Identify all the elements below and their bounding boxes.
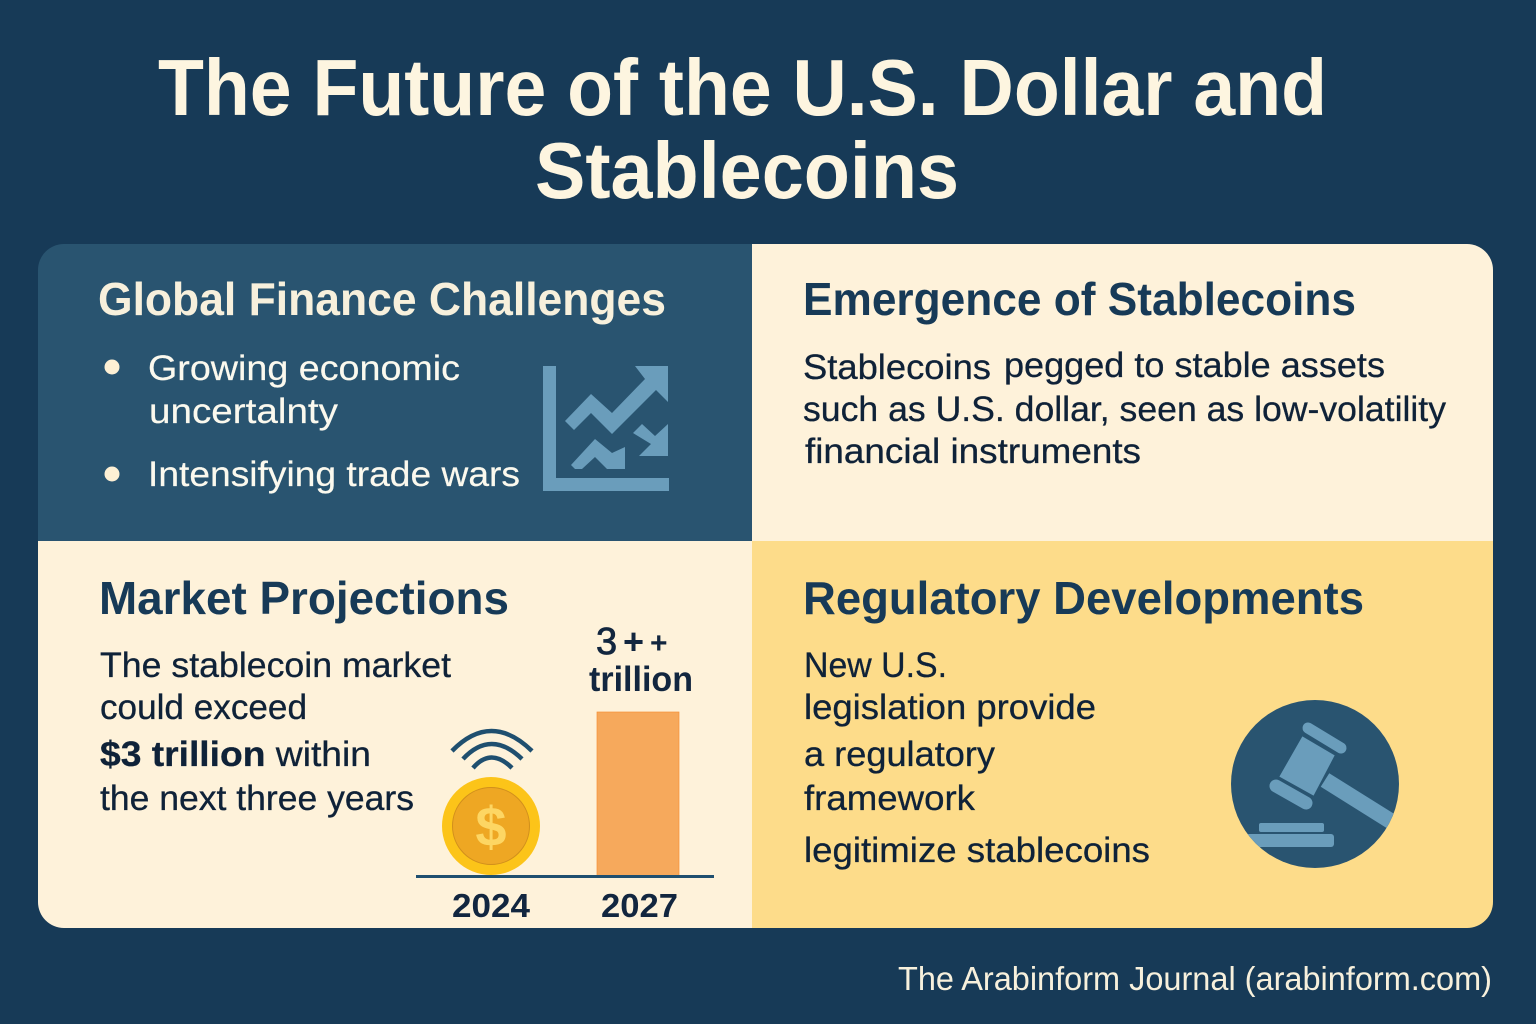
- icon: signal waves: [452, 731, 532, 768]
- bar label: 3++ trillion: +: [650, 627, 668, 660]
- paragraph: market forecast: [100, 646, 451, 818]
- panel: market projections: [38, 541, 752, 928]
- paragraph: market forecast: The stablecoin market: [100, 646, 451, 685]
- paragraph: market forecast: could exceed: [100, 688, 307, 727]
- heading: regulatory developments: Regulatory Developments: [803, 572, 1364, 624]
- bar label: 3++ trillion: +: [623, 621, 644, 662]
- title: The Future of the U.S. Dollar and: [158, 43, 1327, 132]
- paragraph: legislation: a regulatory: [804, 735, 996, 774]
- heading: emergence of stablecoins: Emergence of Stablecoins: [803, 273, 1356, 325]
- axis: [416, 875, 714, 878]
- paragraph: market forecast: $3 trillion within: [100, 735, 371, 774]
- icon: dollar coin: [442, 777, 540, 875]
- footer credit: The Arabinform Journal (arabinform.com): [898, 960, 1492, 997]
- bar label: 3++ trillion: 3: [596, 621, 617, 663]
- panel: emergence of stablecoins: [752, 244, 1493, 541]
- chart: 2024 versus 2027: [416, 621, 714, 924]
- bar label: 3++ trillion: [589, 627, 691, 692]
- paragraph: stablecoin definition: [804, 351, 1446, 464]
- bullet list: Intensifying trade wars: [148, 455, 520, 494]
- icon: dollar coin: $: [475, 795, 507, 858]
- axis label: 2024: 2024: [452, 887, 531, 924]
- icon: gavel: [1231, 700, 1400, 868]
- paragraph: stablecoin definition: financial instruments: [805, 432, 1141, 471]
- title: [158, 43, 1327, 215]
- bar label: 3++ trillion: trillion: [589, 660, 693, 699]
- paragraph: legislation: legislation provide: [804, 688, 1096, 727]
- axis label: 2027: 2027: [601, 887, 678, 924]
- heading: global finance challenges: Global Finance Challenges: [98, 273, 666, 325]
- paragraph: legislation: framework: [804, 779, 976, 818]
- panel: regulatory developments: [752, 541, 1493, 928]
- icon: line chart with arrows: [543, 366, 669, 491]
- panel: global finance challenges: [38, 244, 752, 541]
- paragraph: stablecoin definition: Stablecoins: [803, 348, 991, 387]
- title: Stablecoins: [535, 126, 959, 215]
- paragraph: market forecast: the next three years: [100, 779, 414, 818]
- paragraph: stablecoin definition: such as U.S. dollar, seen as low-volatility: [803, 390, 1446, 429]
- bullet list: uncertalnty: [149, 392, 339, 431]
- bullet list: Growing economic: [148, 349, 460, 388]
- paragraph: stablecoin definition: pegged to stable assets: [1004, 346, 1385, 385]
- paragraph: legislation: New U.S.: [804, 646, 947, 685]
- paragraph: legislation: legitimize stablecoins: [804, 831, 1150, 870]
- heading: market projections: Market Projections: [99, 572, 509, 624]
- bar: 2027: [597, 712, 679, 876]
- bullet list: [104, 349, 520, 494]
- paragraph: legislation: [804, 646, 1150, 870]
